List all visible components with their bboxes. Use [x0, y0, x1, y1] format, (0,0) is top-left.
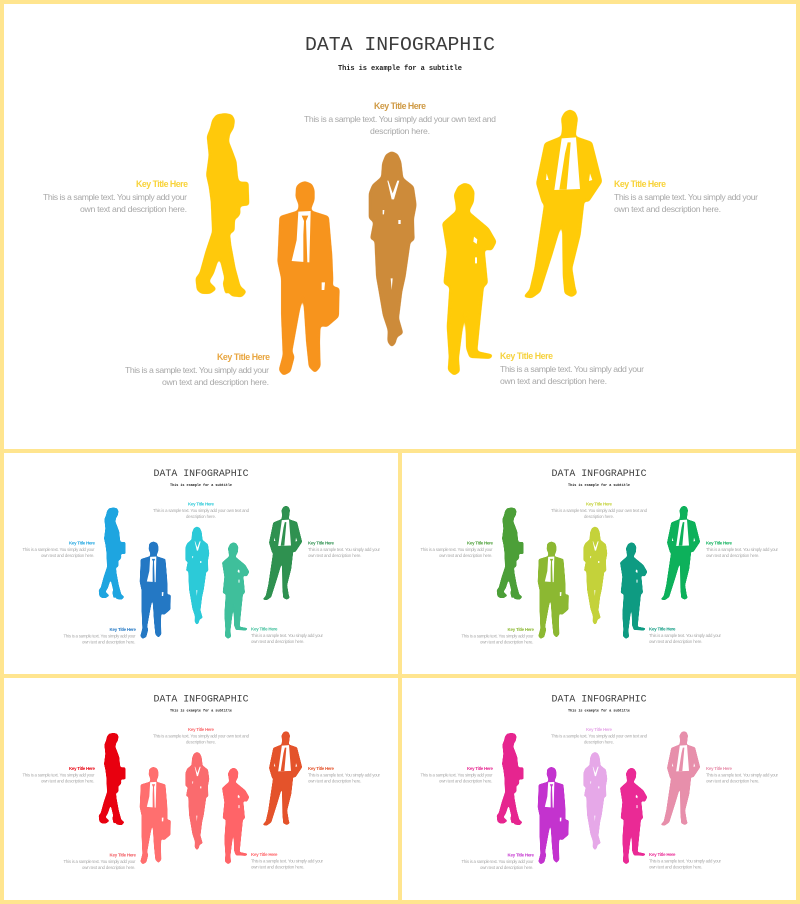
text block: top [551, 502, 648, 519]
text block: bottom left: own text and description here. [82, 865, 136, 870]
text block: bottom left: own text and description here. [82, 640, 136, 644]
figure: man with briefcase [538, 542, 568, 638]
title: DATA INFOGRAPHIC [154, 468, 249, 479]
text block: top: Key Title Here [374, 101, 426, 111]
text block: bottom right: Key Title Here [649, 626, 676, 632]
text block: bottom right [649, 852, 722, 869]
text block: bottom left: This is a sample text. You simply add your [462, 859, 534, 864]
text block: bottom left: Key Title Here [110, 852, 137, 857]
text block: bottom left [64, 627, 137, 644]
text block: left [43, 179, 188, 214]
text block: bottom left: This is a sample text. You simply add your [125, 365, 269, 375]
text block: top: This is a sample text. You simply add your own text and [551, 733, 648, 738]
figure: man with hands in pockets [524, 110, 602, 298]
text block: top [304, 101, 496, 136]
figure: walking woman with folder [497, 733, 523, 825]
text block: right: Key Title Here [614, 179, 666, 189]
subtitle: This is example for a subtitle [568, 708, 630, 713]
text block: top: description here. [186, 739, 216, 744]
text block: left: This is a sample text. You simply add your [22, 772, 95, 777]
text block: bottom right: own text and description here. [649, 639, 702, 644]
figure: man with hands in pockets [661, 506, 700, 600]
figure: woman with lanyard [584, 752, 607, 850]
text block: bottom right [649, 626, 722, 644]
text block: top: This is a sample text. You simply add your own text and [304, 114, 496, 124]
subtitle: This is example for a subtitle [568, 483, 630, 488]
text block: bottom right: This is a sample text. You simply add your [500, 364, 644, 374]
figure: man with briefcase [140, 542, 170, 638]
text block: bottom right: Key Title Here [500, 351, 553, 361]
text block: right [614, 179, 758, 214]
text block: bottom right: own text and description here. [251, 864, 304, 869]
subtitle: This is example for a subtitle [338, 65, 462, 73]
text block: right: Key Title Here [706, 766, 733, 771]
text block: top [551, 727, 648, 744]
text block: bottom left: own text and description here. [480, 865, 534, 870]
text block: bottom right: This is a sample text. You simply add your [649, 858, 722, 863]
text block: right: own text and description here. [614, 204, 721, 214]
text block: right [706, 540, 779, 558]
text block: top: description here. [584, 739, 614, 744]
text block: left: own text and description here. [439, 553, 492, 558]
panel: red variant [4, 678, 398, 900]
text block: bottom left [64, 852, 137, 870]
text block: bottom left: own text and description here. [162, 377, 269, 387]
figure: woman with lanyard [584, 527, 607, 624]
subtitle: This is example for a subtitle [170, 708, 232, 713]
text block: right: Key Title Here [308, 766, 335, 771]
figure: man with hands in pockets [661, 731, 700, 825]
figure: man with crossed arms [222, 543, 249, 638]
text block: bottom left: Key Title Here [508, 852, 535, 857]
text block: left: own text and description here. [41, 778, 94, 783]
panel: green variant [402, 453, 796, 674]
text block: right: This is a sample text. You simply add your [614, 192, 758, 202]
text block: left [420, 766, 494, 783]
text block: top [153, 502, 250, 519]
text block: right: own text and description here. [308, 553, 362, 558]
text block: top: Key Title Here [188, 727, 215, 732]
text block: left: own text and description here. [41, 553, 94, 558]
figure: man with briefcase [278, 182, 339, 375]
text block: bottom left: This is a sample text. You simply add your [64, 859, 136, 864]
text block: right: own text and description here. [706, 553, 760, 558]
text block: bottom left [462, 852, 535, 870]
text block: left: This is a sample text. You simply add your [43, 192, 187, 202]
subtitle: This is example for a subtitle [170, 483, 232, 488]
text block: right: This is a sample text. You simply add your [308, 772, 381, 777]
text block: right: own text and description here. [706, 778, 760, 783]
text block: right [308, 766, 381, 783]
title: DATA INFOGRAPHIC [552, 693, 647, 704]
text block: top: description here. [186, 514, 216, 519]
text block: top: description here. [370, 126, 430, 136]
text block: top: description here. [584, 514, 614, 519]
text block: bottom right: own text and description here. [649, 864, 702, 869]
figure: man with hands in pockets [263, 731, 302, 825]
text block: left: own text and description here. [80, 204, 187, 214]
figure: man with crossed arms [620, 768, 647, 864]
figure: man with crossed arms [443, 183, 496, 375]
text block: top: This is a sample text. You simply add your own text and [551, 508, 648, 513]
figure: man with briefcase [538, 767, 568, 864]
text block: bottom right [251, 626, 324, 644]
text block: left [22, 540, 96, 558]
text block: right [706, 766, 779, 783]
text block: right: own text and description here. [308, 778, 362, 783]
figure: woman with lanyard [369, 152, 416, 347]
figure: walking woman with folder [99, 508, 125, 599]
text block: top [153, 727, 250, 744]
text block: bottom left [125, 352, 270, 387]
text block: right: Key Title Here [706, 540, 733, 546]
text block: bottom right: This is a sample text. You simply add your [251, 858, 324, 863]
text block: bottom left: This is a sample text. You simply add your [462, 634, 534, 638]
text block: top: Key Title Here [586, 502, 613, 506]
text block: bottom right: Key Title Here [251, 626, 278, 632]
text block: bottom left: Key Title Here [508, 627, 535, 632]
text block: bottom left [462, 627, 535, 644]
text block: bottom left: Key Title Here [217, 352, 270, 362]
text block: left: Key Title Here [467, 766, 494, 771]
text block: bottom right [500, 351, 644, 386]
text block: bottom right: own text and description here. [500, 376, 607, 386]
figure: walking woman with folder [99, 733, 125, 825]
panel: main yellow and orange infographic [4, 4, 796, 449]
text block: right: This is a sample text. You simply add your [706, 772, 779, 777]
text block: right: This is a sample text. You simply add your [308, 547, 381, 552]
title: DATA INFOGRAPHIC [305, 34, 495, 56]
text block: left: Key Title Here [136, 179, 188, 189]
title: DATA INFOGRAPHIC [552, 468, 647, 479]
text block: bottom right: This is a sample text. You simply add your [251, 633, 324, 638]
text block: left: Key Title Here [69, 766, 96, 771]
text block: left: Key Title Here [69, 540, 96, 546]
text block: bottom right: This is a sample text. You simply add your [649, 633, 722, 638]
figure: walking woman with folder [497, 508, 523, 599]
text block: bottom right [251, 852, 324, 869]
text block: top: This is a sample text. You simply add your own text and [153, 508, 250, 513]
text block: left: This is a sample text. You simply add your [420, 772, 493, 777]
figure: man with briefcase [140, 767, 170, 864]
figure: man with hands in pockets [263, 506, 302, 600]
text block: top: Key Title Here [586, 727, 613, 732]
text block: left: own text and description here. [439, 778, 492, 783]
text block: bottom right: Key Title Here [251, 852, 278, 857]
text block: bottom left: Key Title Here [110, 627, 137, 632]
figure: woman with lanyard [186, 752, 209, 850]
text block: right: Key Title Here [308, 540, 335, 546]
panel: blue and green variant [4, 453, 398, 674]
text block: bottom right: Key Title Here [649, 852, 676, 857]
figure: man with crossed arms [222, 768, 249, 864]
figure: woman with lanyard [186, 527, 209, 624]
text block: top: Key Title Here [188, 502, 215, 506]
text block: bottom right: own text and description here. [251, 639, 304, 644]
text block: top: This is a sample text. You simply add your own text and [153, 733, 250, 738]
title: DATA INFOGRAPHIC [154, 693, 249, 704]
figure: walking woman with folder [196, 114, 249, 297]
text block: left [22, 766, 96, 783]
text block: right [308, 540, 381, 558]
text block: left: Key Title Here [467, 540, 494, 546]
text block: bottom left: This is a sample text. You simply add your [64, 634, 136, 638]
text block: bottom left: own text and description here. [480, 640, 534, 644]
text block: left: This is a sample text. You simply add your [420, 547, 493, 552]
panel: pink variant [402, 678, 796, 900]
text block: left: This is a sample text. You simply add your [22, 547, 95, 552]
text block: left [420, 540, 494, 558]
figure: man with crossed arms [620, 543, 647, 638]
text block: right: This is a sample text. You simply add your [706, 547, 779, 552]
